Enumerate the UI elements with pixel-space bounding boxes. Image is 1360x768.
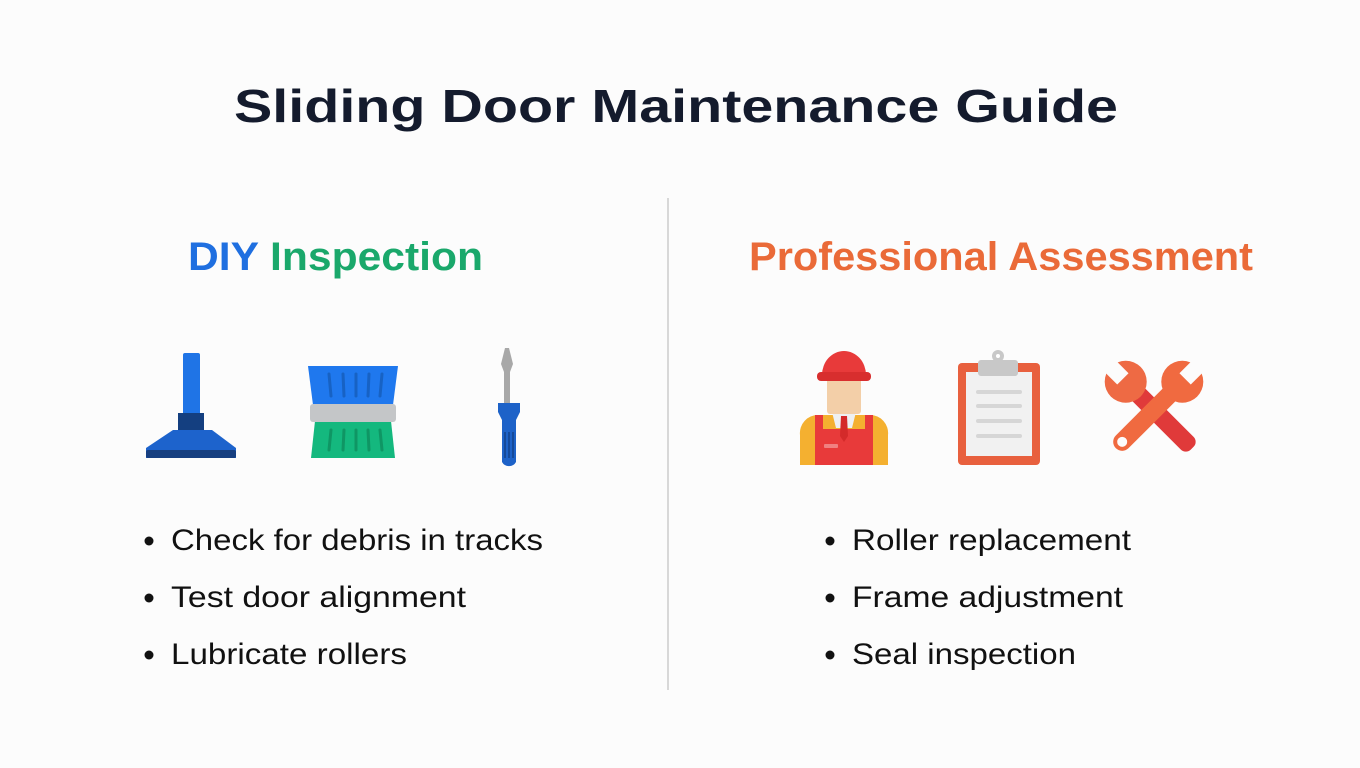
icon: crossed wrenches [1093, 349, 1215, 463]
icon: screwdriver [498, 348, 520, 466]
bullets: professional: Roller replacement [852, 524, 1132, 557]
bullets: DIY [144, 524, 543, 671]
heading: DIY Inspection: DIY Inspection [188, 235, 483, 279]
bullets: DIY: Check for debris in tracks [171, 524, 543, 557]
heading: Professional Assessment: Professional Assessment [749, 235, 1253, 279]
icon: plunger [146, 353, 236, 458]
bullets: professional: Frame adjustment [852, 581, 1124, 614]
title: Sliding Door Maintenance Guide [234, 80, 1118, 132]
bullets: professional: Seal inspection [852, 638, 1076, 671]
panel: professional assessment [749, 235, 1253, 671]
bullets: professional [826, 524, 1132, 671]
panel: DIY inspection [144, 235, 543, 671]
bullets: DIY: Lubricate rollers [171, 638, 407, 671]
icon: brush [308, 366, 398, 458]
icon: worker [800, 351, 888, 465]
icon: clipboard [958, 350, 1040, 465]
bullets: DIY: Test door alignment [171, 581, 467, 614]
